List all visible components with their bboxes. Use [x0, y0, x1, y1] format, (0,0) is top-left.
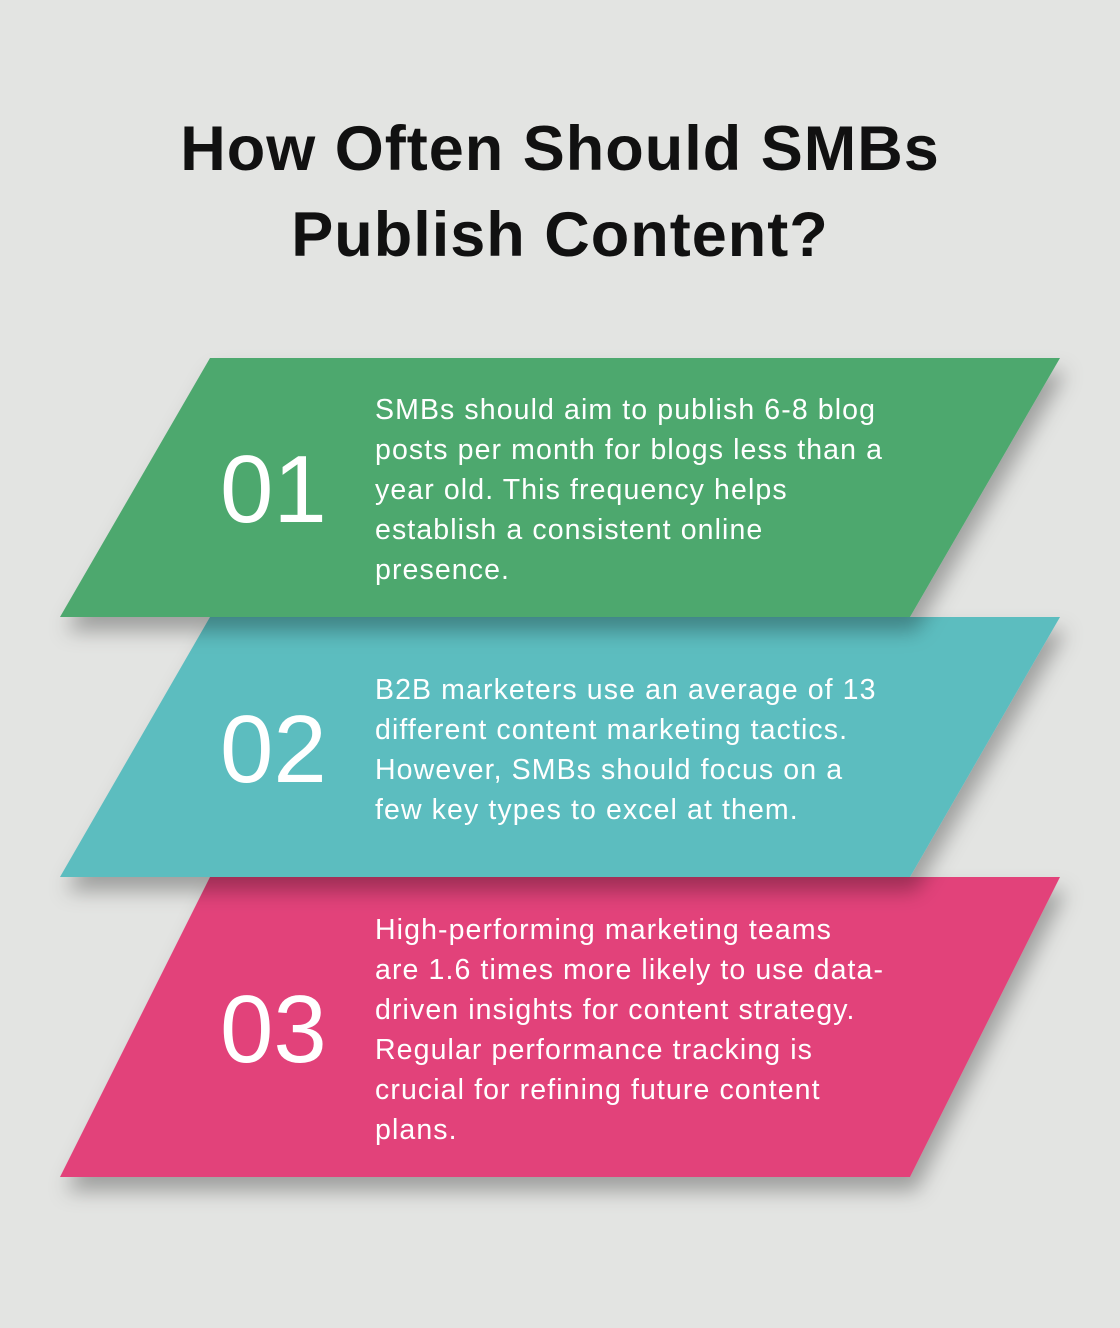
- panel 2 text: different content marketing tactics.: [375, 714, 848, 746]
- panel 1 shape: [60, 358, 1060, 617]
- panel 3 text: are 1.6 times more likely to use data-: [375, 954, 884, 986]
- panel 1 text: year old. This frequency helps: [375, 474, 788, 506]
- panel 3 shape: [60, 877, 1060, 1177]
- panel 2 text: [375, 674, 877, 826]
- panel 2 number: 02: [220, 696, 327, 803]
- panel 3 text: driven insights for content strategy.: [375, 994, 856, 1026]
- panel 3 text: plans.: [375, 1114, 458, 1146]
- panel 3 text: Regular performance tracking is: [375, 1034, 813, 1066]
- panel 1 text: establish a consistent online: [375, 514, 763, 546]
- panel 3 text: crucial for refining future content: [375, 1074, 821, 1106]
- title: How Often Should SMBs: [180, 114, 940, 184]
- panel 2 shape: [60, 617, 1060, 877]
- panel 1 text: [375, 394, 883, 586]
- panel 1 text: presence.: [375, 554, 510, 586]
- panel 2 text: However, SMBs should focus on a: [375, 754, 843, 786]
- panel 3 text: High-performing marketing teams: [375, 914, 832, 946]
- panel 2 text: B2B marketers use an average of 13: [375, 674, 877, 706]
- panel 2 text: few key types to excel at them.: [375, 794, 799, 826]
- panel 3 text: [375, 914, 884, 1146]
- title: [180, 114, 940, 270]
- panel 3 number: 03: [220, 976, 327, 1083]
- title: Publish Content?: [291, 200, 829, 270]
- panel 1 number: 01: [220, 436, 327, 543]
- panel 1 text: SMBs should aim to publish 6-8 blog: [375, 394, 876, 426]
- panel 1 text: posts per month for blogs less than a: [375, 434, 883, 466]
